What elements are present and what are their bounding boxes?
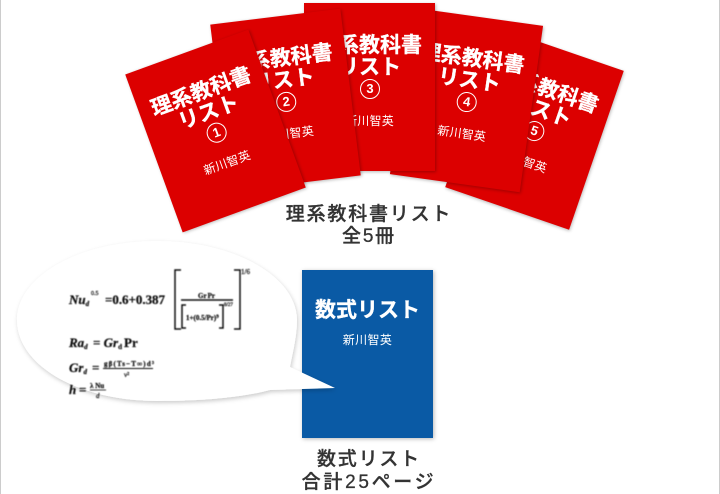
book 4 (390, 8, 543, 192)
book 1 (125, 29, 305, 232)
speech bubble with formulas: h (69, 382, 76, 397)
book 1: 新川智英 (201, 148, 252, 177)
book 4: 理系教科書 (419, 40, 526, 78)
speech bubble with formulas: = (92, 360, 99, 375)
book 5: 新川智英 (498, 147, 548, 176)
speech bubble with formulas (16, 244, 335, 405)
book 4: 新川智英 (437, 123, 487, 144)
book 5: 5 (528, 122, 540, 139)
book 3: 新川智英 (345, 114, 394, 128)
speech bubble with formulas: = (79, 382, 86, 397)
speech bubble with formulas: ν² (124, 371, 129, 379)
speech bubble with formulas: d (83, 368, 87, 376)
speech bubble with formulas: 9 (216, 315, 219, 320)
book 2: リスト (250, 65, 316, 96)
book 2: 理系教科書 (227, 41, 334, 77)
speech bubble with formulas: 8/27 (224, 303, 233, 308)
blue book: formula list: 数式リスト (315, 299, 420, 322)
speech bubble with formulas: λ Nu (90, 382, 104, 390)
caption: textbook list (286, 204, 452, 247)
book 3: リスト (338, 56, 401, 79)
book 2: 新川智英 (265, 124, 315, 144)
speech bubble with formulas: d (86, 300, 90, 308)
book 1: 1 (210, 123, 222, 140)
speech bubble with formulas: 1+(0.5/Pr) (186, 314, 216, 322)
caption: formula list: 数式リスト (317, 449, 421, 470)
speech bubble with formulas: = Gr (93, 335, 118, 350)
book 1: 理系教科書 (148, 63, 254, 120)
speech bubble with formulas: Pr (124, 335, 138, 350)
book 4: 4 (462, 94, 471, 109)
book 5: 理系教科書 (494, 62, 601, 118)
speech bubble with formulas: GrPr (198, 292, 215, 300)
blue book: formula list: 新川智英 (343, 333, 392, 347)
book 3: 理系教科書 (317, 34, 422, 57)
book 2: 2 (282, 94, 291, 109)
speech bubble with formulas: 0.5 (91, 291, 98, 297)
speech bubble with formulas: d (96, 392, 100, 400)
book 4: リスト (436, 65, 502, 96)
speech bubble with formulas: Ra (69, 335, 84, 350)
caption: textbook list: 全5冊 (342, 226, 396, 247)
caption: textbook list: 理系教科書リスト (286, 204, 452, 225)
caption: formula list: 合計25ページ (302, 472, 436, 493)
speech bubble with formulas: Gr (69, 360, 83, 375)
speech bubble with formulas: =0.6+0.387 (105, 292, 166, 307)
speech bubble with formulas: 1/6 (241, 268, 250, 276)
blue book: formula list (302, 270, 433, 438)
speech bubble with formulas: gβ(Ts−T∞)d³ (104, 360, 154, 368)
book 5: リスト (507, 89, 574, 132)
book 5 (445, 28, 623, 230)
book 3 (304, 3, 435, 171)
book 3: 3 (366, 81, 374, 96)
book 2 (210, 9, 361, 191)
caption: formula list (302, 448, 436, 493)
book 1: リスト (175, 91, 242, 134)
speech bubble with formulas: d (118, 343, 122, 351)
speech bubble with formulas: Nu (69, 292, 86, 307)
speech bubble with formulas: d (84, 343, 88, 351)
